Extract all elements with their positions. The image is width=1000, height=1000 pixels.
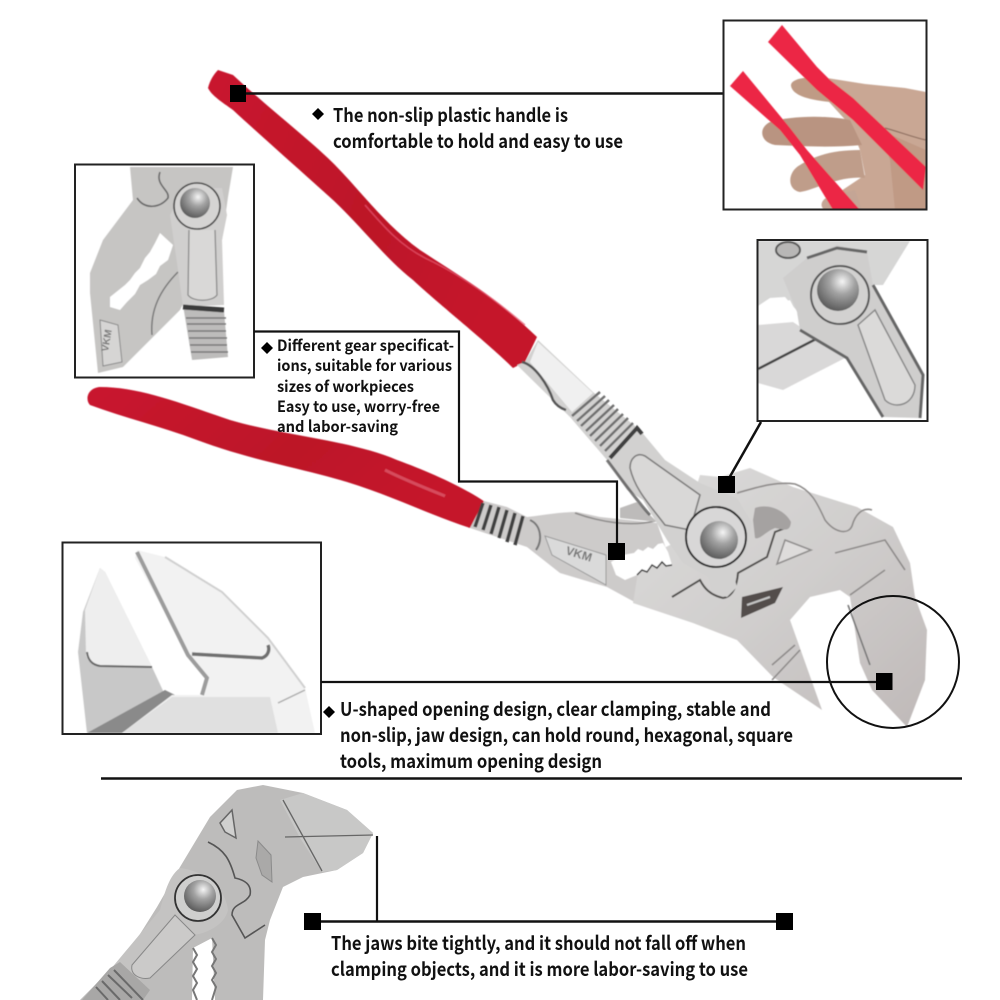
hand: index finger [762, 117, 862, 147]
section divider [101, 777, 962, 780]
jaw head: lower link socket outline [672, 527, 788, 598]
line [238, 92, 723, 95]
line 3: sizes of workpieces [277, 375, 414, 397]
inset photo content [90, 167, 233, 377]
knurled grip [82, 962, 150, 1000]
marker square [718, 476, 735, 493]
hand: little finger [821, 198, 830, 208]
interlock groove [208, 842, 265, 938]
line 5: and labor-saving [277, 415, 398, 437]
lower handle: red grip [87, 387, 485, 528]
bullet diamond [312, 108, 324, 120]
white toothed gap [192, 938, 215, 1000]
pliers head: grayscale photo [80, 785, 373, 1000]
pivot: ring [686, 507, 746, 567]
dark diagonal band [87, 690, 175, 733]
upper arm: slotted shadow [522, 362, 566, 410]
leader line: handle callout [230, 85, 723, 102]
link arm [796, 251, 922, 418]
jaws description text [331, 929, 748, 982]
hand: middle finger [790, 150, 865, 192]
marker square left [304, 913, 321, 930]
line 1: The non-slip plastic handle is [333, 101, 568, 128]
line 4: Easy to use, worry-free [277, 395, 440, 417]
right jaw groove [192, 645, 269, 658]
line 2: clamping objects, and it is more labor-saving to use [331, 955, 748, 982]
marker square [230, 85, 246, 102]
rivet [180, 188, 210, 218]
bullet diamond [323, 706, 335, 718]
jaw head: adjustment cutout [753, 506, 791, 538]
knurled end [183, 305, 228, 360]
arm recess [858, 310, 915, 405]
jaw head: diamond slot [741, 587, 783, 618]
bullet diamond [261, 342, 273, 354]
line [321, 681, 885, 683]
rivet [184, 880, 216, 912]
upper jaw fragment behind the link [620, 502, 657, 522]
line [728, 422, 761, 480]
upper arm: silver shank [517, 340, 752, 597]
grip: left strip [730, 71, 860, 210]
jaw tip seam [283, 800, 373, 871]
upper handle: red grip [208, 70, 537, 368]
upper arm: knurled grip [572, 392, 642, 458]
inset frame background [75, 164, 254, 378]
jaw tip lighter face [280, 793, 373, 872]
right jaw inner edge [137, 552, 207, 695]
gap teeth [193, 938, 216, 1000]
white gap under the arm [160, 310, 225, 377]
line 2: non-slip, jaw design, can hold round, hexagonal, square [340, 721, 793, 748]
pivot ring [811, 266, 869, 324]
line 2: comfortable to hold and easy to use [333, 127, 623, 154]
upper jaw backdrop [758, 241, 910, 309]
lower jaw arm: silver [470, 501, 670, 605]
inset: U-shaped opening close-up [62, 542, 321, 734]
inset: jaw with teeth close-up [75, 164, 254, 378]
right jaw outer edge [165, 557, 305, 688]
upper arm: dark edge shadow [607, 460, 650, 515]
top edge shadow [807, 248, 867, 258]
hand: thumb [790, 77, 830, 102]
small rivet [776, 242, 800, 258]
line 1: The jaws bite tightly, and it should not fall off when [331, 929, 746, 956]
inset frame background [758, 240, 928, 421]
leader line: opening callout [321, 596, 959, 728]
head body [80, 785, 373, 1000]
lower jaw: raised brand plate [545, 536, 606, 585]
lower arm: knurled grip [475, 503, 540, 550]
jaw head: body groove lines [737, 483, 905, 680]
line 1: U-shaped opening design, clear clamping, stable and [340, 695, 771, 722]
upper arm: link recess [630, 455, 700, 530]
recess: hexagon [256, 841, 272, 882]
link groove [188, 230, 217, 300]
pliers: main product photo [87, 70, 927, 727]
left jaw groove [87, 652, 152, 667]
left jaw shadowed base [78, 568, 165, 733]
vertical line [376, 836, 378, 921]
inset frame background [724, 20, 926, 210]
jaw head: triangular recess [777, 540, 811, 564]
lower jaw: curved shadow edge [575, 513, 655, 524]
marker square [608, 543, 625, 560]
jaw body [90, 167, 233, 373]
jaw line [758, 338, 818, 369]
upper handle: highlight [365, 205, 525, 325]
gear description text [261, 334, 454, 437]
pivot ring [174, 183, 220, 229]
plate seam [278, 690, 305, 703]
grip: right strip [768, 25, 926, 190]
rivet [817, 269, 859, 311]
link recess [132, 915, 195, 978]
jaw opening: lower teeth [637, 562, 672, 575]
inset photo content [758, 241, 923, 418]
marker square [876, 673, 892, 690]
right jaw body [122, 550, 315, 733]
link arm [110, 868, 228, 980]
interlock groove [137, 172, 168, 206]
jaw head: slot glint [747, 597, 770, 605]
recess: triangle [220, 810, 236, 838]
knurl lines [96, 970, 143, 1000]
jaw head: large silver body [633, 468, 927, 727]
inset frame background [62, 542, 321, 734]
brand plate [100, 320, 122, 366]
line [254, 332, 617, 552]
leader line: gear callout [254, 332, 625, 560]
line 2: ions, suitable for various [277, 354, 452, 376]
left jaw bright face [85, 568, 152, 667]
lower jaw piece [758, 322, 845, 390]
pivot: rivet ball [700, 521, 738, 559]
side groove [152, 272, 178, 335]
magnifier circle [827, 596, 959, 728]
inset photo content [78, 550, 315, 733]
knurl lines [183, 307, 228, 352]
lower handle: highlight near collar [385, 470, 445, 496]
lower jaw: brand stamp: VKM [564, 543, 594, 565]
lower shank plate [122, 697, 278, 733]
inset: pivot link close-up [758, 240, 928, 421]
leader line: pivot callout [718, 422, 761, 493]
hand: shadow crease [885, 128, 926, 140]
jaw opening: white toothed gap [611, 543, 672, 580]
white gap [758, 296, 798, 314]
toothed slot [110, 233, 173, 310]
pivot ring [175, 875, 221, 921]
inset photo content [730, 25, 926, 210]
arm edge shadow [800, 285, 923, 418]
leader line: jaws callout [304, 836, 793, 930]
opening description text [323, 695, 793, 774]
line 1: Different gear specificat- [277, 334, 454, 356]
hand: palm [820, 78, 926, 210]
brand stamp: VKM [100, 329, 115, 353]
horizontal line [312, 920, 785, 923]
marker square right [776, 913, 793, 930]
hand: palm shadow [890, 136, 926, 208]
inset: hand holding red grips [724, 20, 926, 210]
upper arm: polished highlight [530, 342, 593, 412]
line 3: tools, maximum opening design [340, 747, 602, 774]
link arm [170, 188, 227, 307]
handle description text [312, 101, 623, 154]
